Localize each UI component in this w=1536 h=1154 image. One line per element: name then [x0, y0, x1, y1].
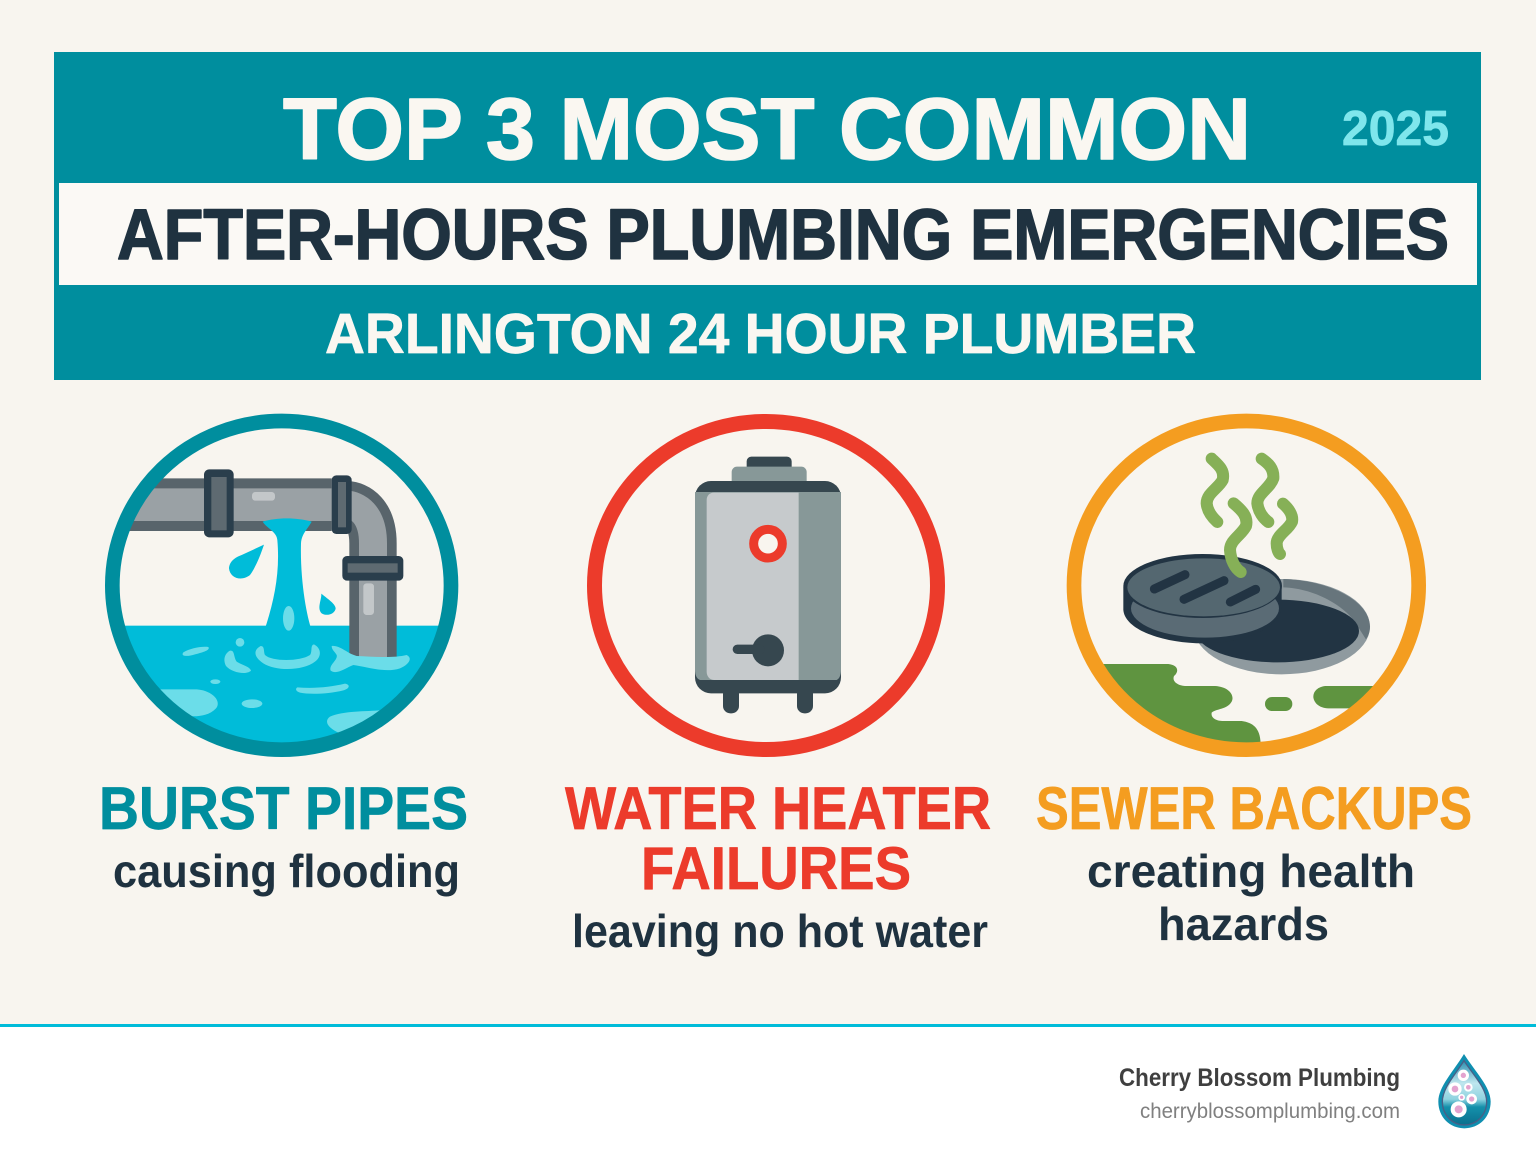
- ring: [1074, 421, 1419, 750]
- open manhole: [1193, 579, 1370, 674]
- title band: [59, 183, 1477, 285]
- sewage puddles: [1093, 664, 1383, 745]
- ring: [112, 421, 451, 750]
- burst pipes label: [99, 775, 468, 897]
- sewer backups label: [1036, 775, 1472, 950]
- header banner: [54, 52, 1481, 380]
- title line two: AFTER-HOURS PLUMBING EMERGENCIES: [117, 196, 1449, 275]
- website: cherryblossomplumbing.com: [1140, 1100, 1400, 1123]
- water heater description: leaving no hot water: [572, 905, 988, 957]
- water jet and drops: [229, 518, 410, 672]
- sewer backups description: hazards: [1158, 898, 1329, 950]
- flood water: [125, 626, 438, 742]
- icon: water heater: [594, 422, 938, 750]
- sewer backups description: creating health: [1087, 845, 1415, 897]
- manhole lid: [1123, 554, 1282, 643]
- burst pipes description: causing flooding: [113, 845, 460, 897]
- sewer backups description: [1087, 845, 1415, 950]
- odor fumes: [1207, 459, 1292, 572]
- title line one: TOP 3 MOST COMMON: [283, 81, 1251, 178]
- water heater label: [565, 775, 991, 957]
- icon: burst pipe: [110, 421, 457, 759]
- ring: [594, 422, 938, 750]
- subtitle: ARLINGTON 24 HOUR PLUMBER: [325, 302, 1196, 366]
- water heater label: WATER HEATER: [565, 775, 991, 842]
- burst pipes label: BURST PIPES: [99, 775, 468, 842]
- icon: sewer backup: [1074, 421, 1419, 750]
- pipe: [110, 469, 403, 658]
- footer: [0, 1024, 1536, 1154]
- water heater label: FAILURES: [641, 835, 911, 902]
- logo: blossom water drop: [1438, 1054, 1491, 1128]
- year badge: 2025: [1342, 102, 1449, 156]
- company name: Cherry Blossom Plumbing: [1119, 1064, 1400, 1092]
